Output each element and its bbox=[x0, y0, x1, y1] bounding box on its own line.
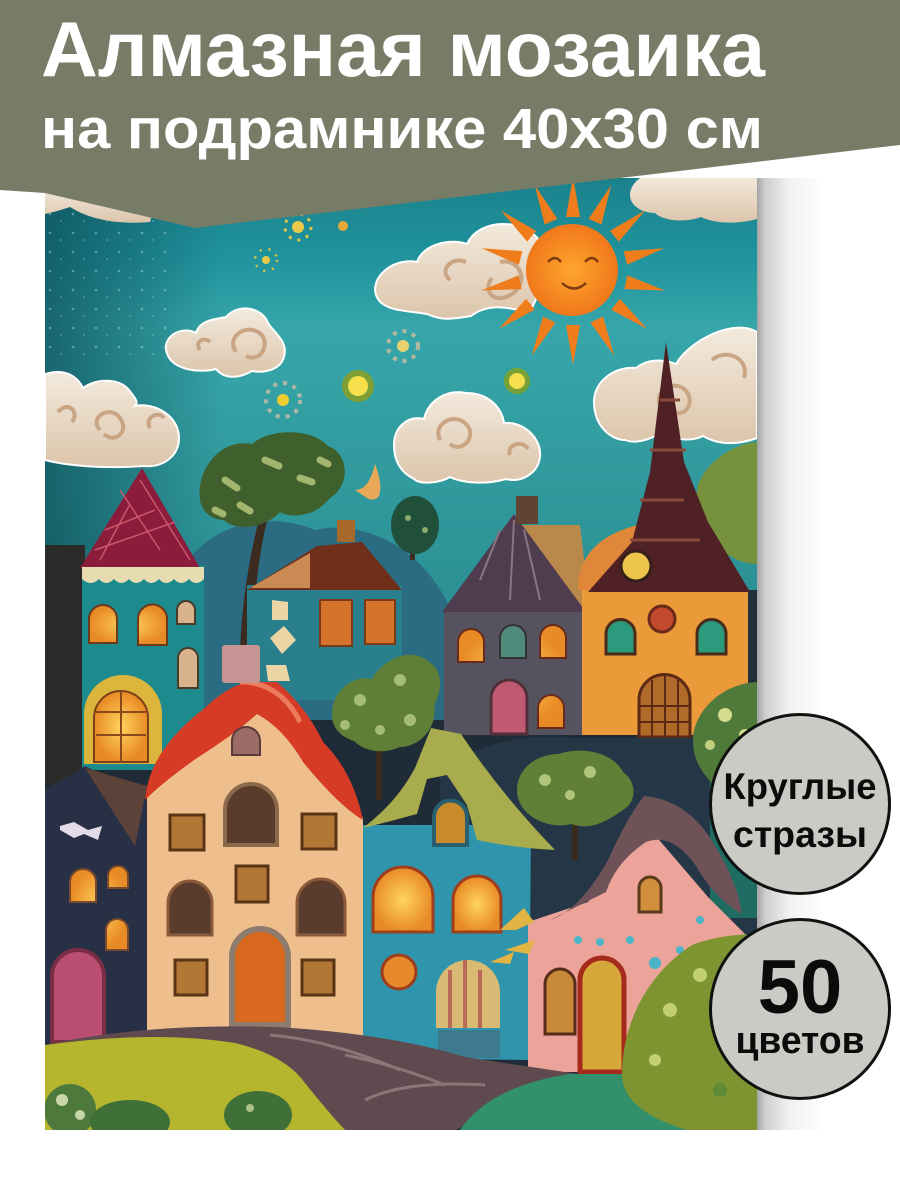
left sky vignette bbox=[45, 207, 200, 560]
badge: 50 colours: 50 bbox=[758, 945, 842, 1030]
left edge dark strip bbox=[45, 545, 85, 785]
tree middle bbox=[332, 655, 440, 800]
stars bbox=[255, 214, 530, 417]
hill behind foreground bbox=[440, 737, 757, 938]
cloud centre left small bbox=[166, 308, 285, 377]
house pink bbox=[528, 796, 748, 1072]
tree behind pink house bbox=[517, 751, 634, 860]
sky speckles bbox=[48, 212, 166, 355]
badge: round rhinestones bbox=[710, 714, 890, 894]
top banner bbox=[0, 0, 900, 228]
green field bbox=[460, 1074, 757, 1130]
tree back left bbox=[200, 432, 345, 650]
title: Алмазная мозаика bbox=[41, 5, 766, 93]
house 1 teal bbox=[80, 468, 204, 770]
green band right bbox=[710, 781, 757, 918]
small tree bbox=[391, 496, 439, 560]
cloud right of spire bbox=[594, 328, 757, 443]
road bbox=[45, 1026, 585, 1130]
painting bbox=[44, 175, 757, 1144]
house 5 dark left bbox=[45, 766, 147, 1046]
cloud top right bbox=[630, 175, 757, 223]
bottom right tree bbox=[622, 934, 757, 1130]
sun rays bbox=[480, 177, 666, 365]
badge: 50 colours bbox=[710, 920, 890, 1098]
badge: round rhinestones: Круглые bbox=[724, 766, 876, 807]
canvas side shadow bbox=[757, 178, 827, 1130]
bird bbox=[355, 464, 380, 500]
right edge strip bbox=[748, 590, 757, 618]
big peach house bbox=[145, 645, 363, 1036]
tree right of orange bbox=[693, 682, 757, 786]
yellow field bbox=[45, 1037, 345, 1130]
bushes bbox=[44, 1084, 292, 1144]
house 3 dark bbox=[442, 496, 590, 735]
cloud centre large bbox=[375, 224, 545, 319]
house blue bbox=[363, 728, 555, 1060]
badge: 50 colours: цветов bbox=[736, 1020, 864, 1062]
house 4 orange tower bbox=[578, 342, 750, 737]
sun bbox=[526, 224, 618, 316]
hills behind houses bbox=[192, 521, 448, 720]
right tree bbox=[696, 442, 757, 564]
cloud mid bbox=[394, 392, 540, 483]
road marks bbox=[270, 1035, 485, 1100]
sky bbox=[45, 178, 757, 618]
cloud left bbox=[45, 372, 179, 467]
house 2 bbox=[247, 520, 402, 700]
subtitle: на подрамнике 40х30 см bbox=[41, 97, 763, 161]
cloud swirls bbox=[58, 261, 745, 455]
cloud top left bbox=[45, 193, 152, 223]
fence yellow leaves bbox=[490, 908, 535, 964]
painting base bbox=[45, 720, 694, 1130]
sun face bbox=[548, 258, 598, 288]
badge: round rhinestones: стразы bbox=[733, 814, 867, 855]
